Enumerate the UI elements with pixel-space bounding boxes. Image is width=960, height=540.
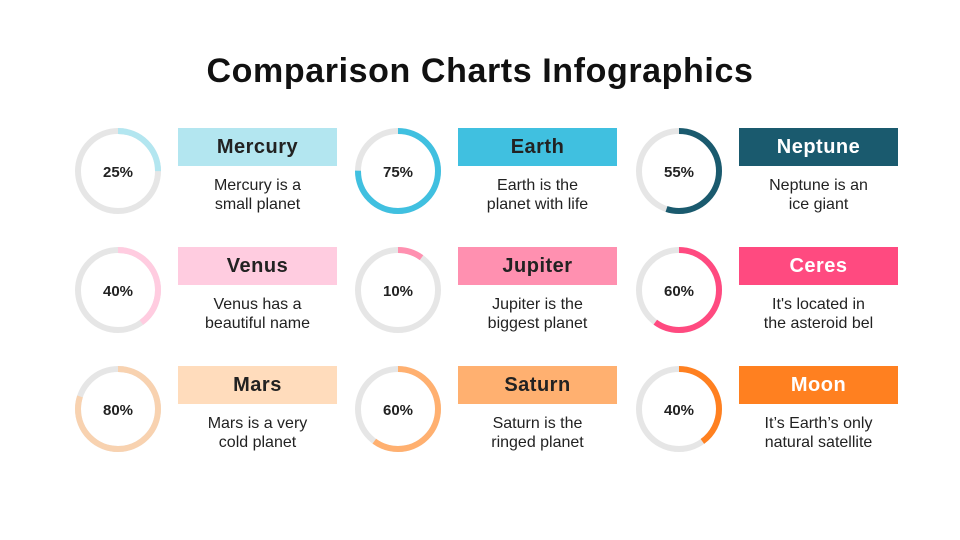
- description: [491, 415, 584, 451]
- donut: 75%: [355, 128, 441, 214]
- donut: 55%: [636, 128, 722, 214]
- donut: 80%: 80%: [103, 402, 133, 419]
- donut: 40%: 40%: [664, 402, 694, 419]
- item: Jupiter: [355, 247, 617, 333]
- description: beautiful name: [205, 315, 310, 332]
- item: Neptune: [636, 128, 898, 214]
- donut: 25%: [75, 128, 161, 214]
- label: Venus: [178, 247, 337, 285]
- label: Venus: Venus: [227, 255, 288, 277]
- description: Venus has a: [213, 296, 302, 313]
- description: Saturn is the: [493, 415, 582, 432]
- label: Mercury: [178, 128, 337, 166]
- donut: 60%: [355, 366, 441, 452]
- item: Earth: [355, 128, 617, 214]
- donut: 40%: [75, 247, 161, 333]
- description: Mercury is a: [214, 177, 301, 194]
- label: Neptune: [739, 128, 898, 166]
- description: small planet: [215, 196, 300, 213]
- description: Mars is a very: [208, 415, 307, 432]
- description: It's located in: [772, 296, 865, 313]
- donut: 60%: 60%: [664, 283, 694, 300]
- description: [214, 177, 302, 213]
- label: Moon: [739, 366, 898, 404]
- label: Saturn: Saturn: [504, 374, 571, 396]
- item: Venus: [75, 247, 337, 333]
- description: ringed planet: [491, 434, 584, 451]
- description: It’s Earth’s only: [765, 415, 872, 432]
- item: Moon: [636, 366, 898, 452]
- description: [208, 415, 308, 451]
- description: ice giant: [789, 196, 848, 213]
- label: Saturn: [458, 366, 617, 404]
- donut: 10%: [355, 247, 441, 333]
- donut: 60%: [636, 247, 722, 333]
- donut: 60%: 60%: [383, 402, 413, 419]
- description: Neptune is an: [769, 177, 868, 194]
- donut: 25%: 25%: [103, 164, 133, 181]
- description: cold planet: [219, 434, 296, 451]
- description: [765, 415, 872, 451]
- description: the asteroid bel: [764, 315, 873, 332]
- donut: 10%: 10%: [383, 283, 413, 300]
- description: Jupiter is the: [492, 296, 583, 313]
- donut: 40%: 40%: [103, 283, 133, 300]
- description: [487, 177, 588, 213]
- item: Saturn: [355, 366, 617, 452]
- label: Ceres: [739, 247, 898, 285]
- description: biggest planet: [488, 315, 587, 332]
- description: natural satellite: [765, 434, 872, 451]
- label: Earth: [458, 128, 617, 166]
- label: Mercury: Mercury: [217, 136, 298, 158]
- donut: 80%: [75, 366, 161, 452]
- title: Comparison Charts Infographics: [207, 52, 753, 90]
- label: Mars: [178, 366, 337, 404]
- donut: 75%: 75%: [383, 164, 413, 181]
- description: [769, 177, 868, 213]
- label: Jupiter: Jupiter: [502, 255, 573, 277]
- label: Neptune: Neptune: [777, 136, 860, 158]
- item: Ceres: [636, 247, 898, 333]
- item: Mercury: [75, 128, 337, 214]
- description: Earth is the: [497, 177, 578, 194]
- label: Ceres: Ceres: [789, 255, 848, 277]
- description: planet with life: [487, 196, 588, 213]
- description: [488, 296, 588, 332]
- label: Earth: Earth: [511, 136, 564, 158]
- label: Mars: Mars: [233, 374, 282, 396]
- label: Jupiter: [458, 247, 617, 285]
- description: [205, 296, 310, 332]
- item: Mars: [75, 366, 337, 452]
- donut: 40%: [636, 366, 722, 452]
- description: [764, 296, 873, 332]
- label: Moon: Moon: [791, 374, 846, 396]
- donut: 55%: 55%: [664, 164, 694, 181]
